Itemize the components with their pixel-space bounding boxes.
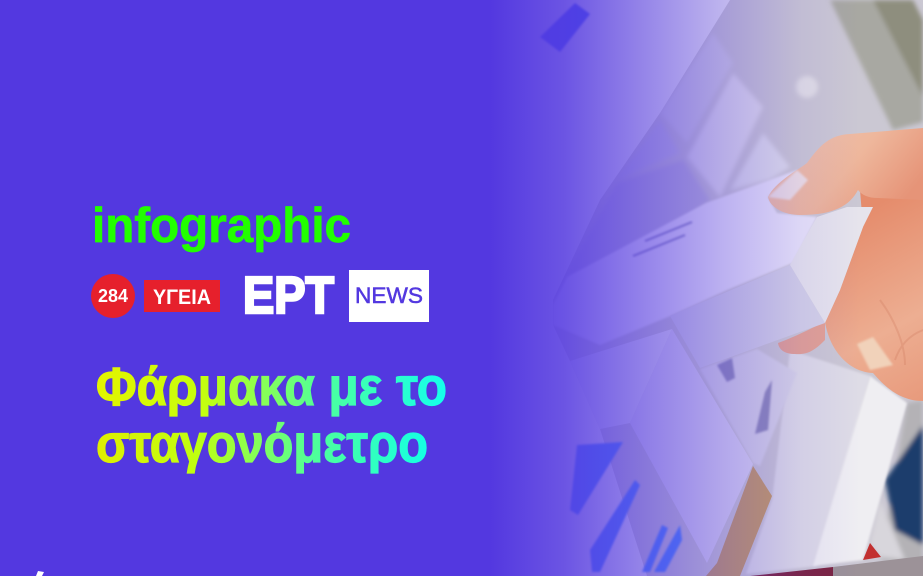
photo: pointing fingernail bbox=[768, 170, 808, 200]
title bbox=[96, 357, 447, 474]
photo: blue stripes on the lower boxes bbox=[570, 442, 682, 572]
photo: bottom edge strip bbox=[750, 567, 833, 576]
logo: ΥΓΕΙΑ label bbox=[144, 280, 220, 312]
photo: box behind on the shelf bbox=[700, 349, 797, 466]
title: Φάρμακα με το bbox=[96, 357, 447, 417]
photo: box front face, lower box bbox=[630, 329, 753, 563]
logo: ΥΓΕΙΑ label: ΥΓΕΙΑ bbox=[153, 286, 211, 309]
photo: box top face, lower box bbox=[570, 329, 672, 429]
photo: label on the back box bbox=[717, 358, 772, 434]
photo: lower fingernail bbox=[857, 337, 893, 370]
photo: hand bbox=[825, 190, 923, 401]
heading: infographic: infographic bbox=[92, 199, 351, 253]
photo: shelf base bbox=[440, 0, 923, 576]
photo: shelf white edge bbox=[746, 350, 870, 574]
photo: large white boxes on the left bbox=[440, 0, 730, 576]
logo: 284 badge: 284 bbox=[98, 286, 128, 306]
photo: blurred shelf details bbox=[553, 0, 923, 570]
title: σταγονόμετρο bbox=[96, 414, 428, 474]
photo: held box, side face bbox=[790, 207, 873, 323]
logo: NEWS box: NEWS bbox=[355, 283, 423, 308]
white accent mark at bottom edge bbox=[36, 571, 44, 576]
logo: ΕΡΤ wordmark: ΕΡΤ bbox=[243, 267, 334, 325]
logo: 284 badge bbox=[91, 274, 135, 318]
logo: NEWS box bbox=[349, 270, 429, 322]
photo: held box, front face bbox=[670, 265, 825, 368]
photo: hand taking a medicine box from a pharmacy shelf bbox=[440, 0, 923, 576]
photo: blue label on the top box bbox=[540, 3, 590, 52]
photo: knuckle creases bbox=[880, 300, 923, 365]
photo: tan side of lower box bbox=[706, 466, 772, 576]
photo: middle finger behind box bbox=[778, 322, 825, 354]
photo: held box, top face bbox=[553, 170, 817, 345]
photo: red package corner bbox=[863, 543, 881, 560]
photo: pointing finger bbox=[768, 128, 923, 215]
photo: printed lines on held box bbox=[633, 222, 692, 256]
